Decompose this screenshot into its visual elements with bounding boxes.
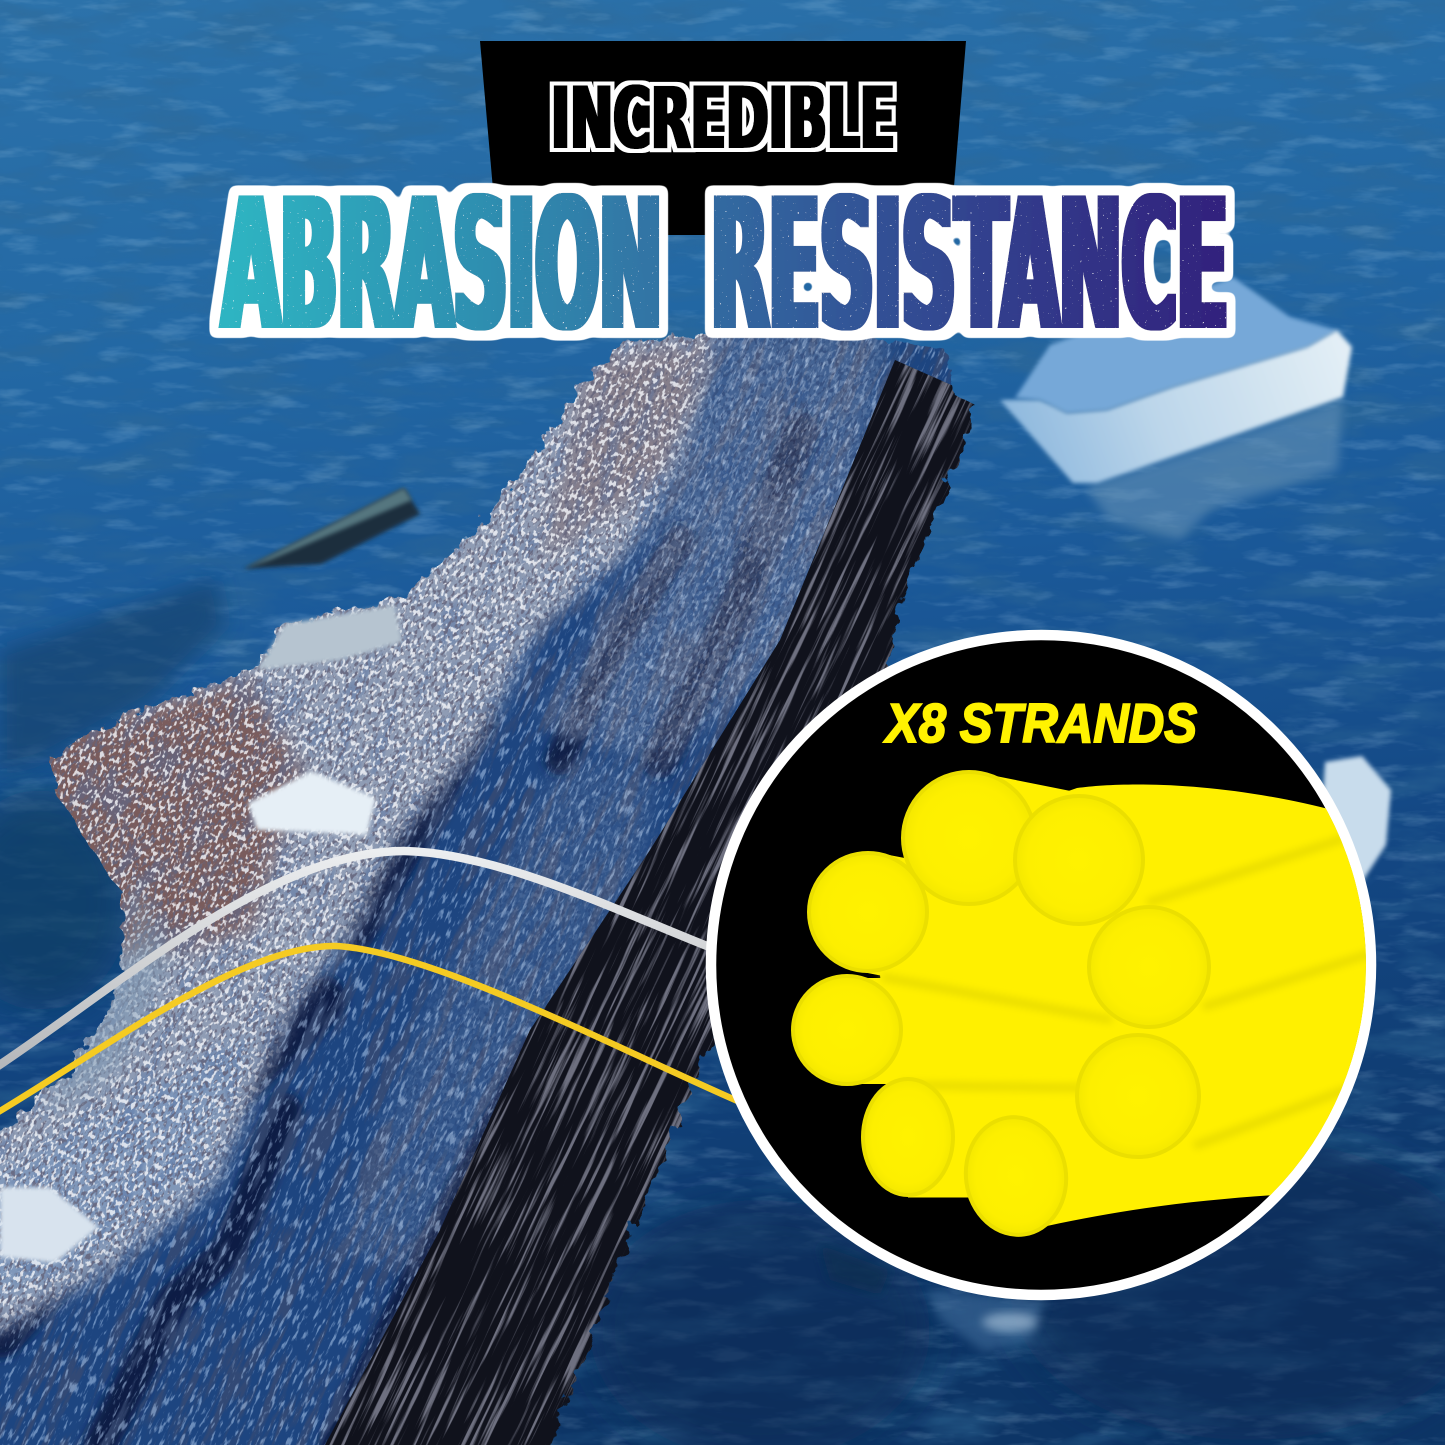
fill between tubes bbox=[880, 784, 1420, 1226]
ice block reflection bbox=[1085, 400, 1343, 540]
yellow fishing line bbox=[0, 946, 740, 1114]
ice patch: upper left of log bbox=[257, 605, 402, 670]
ice block bbox=[1000, 277, 1352, 483]
frosted log bbox=[0, 332, 975, 1445]
heading: abrasion resistance: ABRASION bbox=[222, 159, 662, 371]
title banner bbox=[480, 41, 966, 235]
dark right band bbox=[325, 360, 975, 1445]
strand end 8 bbox=[958, 1111, 1074, 1241]
strand end 3 bbox=[809, 853, 927, 971]
braided strands bbox=[793, 772, 1420, 1241]
lens disc bbox=[711, 635, 1371, 1295]
blue bark texture bbox=[0, 338, 952, 1445]
strand end 5 bbox=[793, 976, 901, 1084]
strand tubes bbox=[862, 776, 1070, 1198]
translucent ice rim bbox=[40, 870, 170, 1120]
ice fragments below lens bbox=[820, 1245, 1045, 1352]
strand end 7 bbox=[863, 1079, 953, 1195]
snow patch: lower left of log bbox=[0, 1187, 99, 1263]
frost band bbox=[0, 332, 896, 1345]
white fishing line bbox=[0, 851, 712, 1068]
strand end 2 bbox=[1015, 796, 1143, 924]
strand end 1 bbox=[903, 772, 1035, 904]
lens label: X8 STRANDS bbox=[883, 692, 1197, 754]
strand end 4 bbox=[1089, 907, 1209, 1027]
dark crevices bbox=[0, 430, 800, 1445]
magnifier lens: x8 strands bbox=[711, 635, 1420, 1295]
strand end 6 bbox=[1077, 1035, 1199, 1157]
snow patch: centre left of log bbox=[248, 771, 376, 835]
ice shard behind lens bbox=[1320, 756, 1391, 882]
tube shading bbox=[882, 838, 1375, 1146]
heading: incredible: INCREDIBLE bbox=[551, 69, 895, 169]
